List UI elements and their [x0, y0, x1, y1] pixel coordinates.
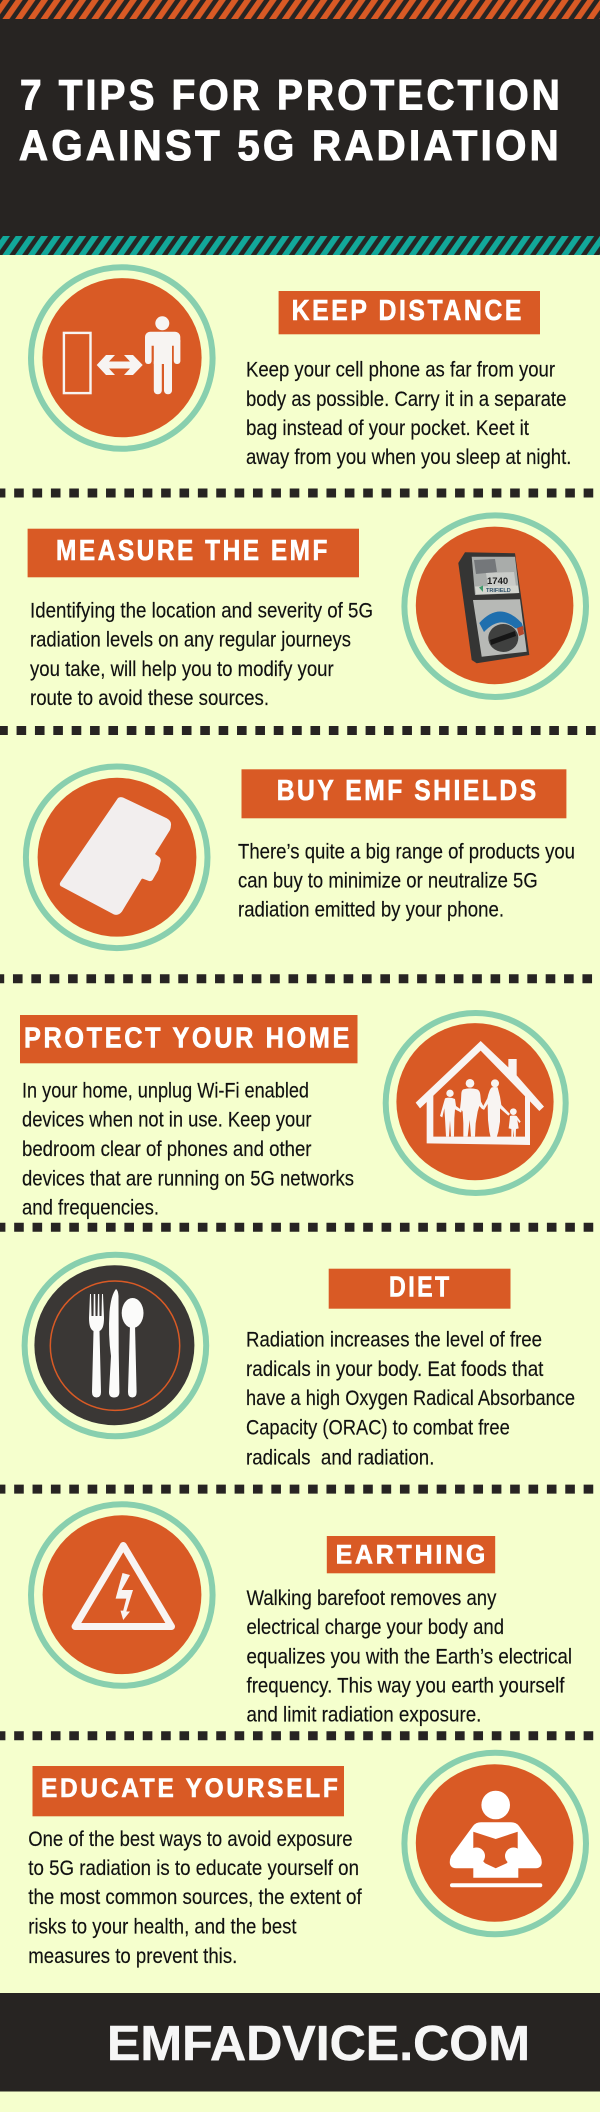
icon: person reading a book: [404, 1753, 586, 1934]
icon: emf meter: 1740: [487, 576, 508, 587]
title: 7 TIPS FOR PROTECTION: [20, 72, 563, 119]
text: keep distance: body as possible. Carry it in a separate: [246, 388, 566, 411]
icon: emf meter: [404, 515, 586, 697]
text: earthing: and limit radiation exposure.: [246, 1704, 481, 1727]
text: buy emf shields: [238, 840, 575, 922]
heading: diet: DIET: [389, 1272, 452, 1304]
text: earthing: [246, 1587, 572, 1727]
text: protect your home: and frequencies.: [22, 1196, 159, 1219]
text: measure the emf: [30, 599, 373, 710]
text: protect your home: devices that are running on 5G networks: [22, 1167, 354, 1190]
text: protect your home: bedroom clear of phones and other: [22, 1138, 312, 1161]
text: keep distance: bag instead of your pocket. Keet it: [246, 417, 529, 440]
icon: cutlery on plate: [25, 1255, 206, 1436]
footer banner: EMFADVICE.COM: [107, 2016, 530, 2071]
icon: phone distance from person: [31, 267, 213, 449]
heading: buy emf shields: BUY EMF SHIELDS: [277, 775, 539, 807]
text: educate yourself: the most common sources, the extent of: [28, 1886, 362, 1909]
panel: educate yourself: [28, 1753, 586, 1968]
heading: protect your home: [20, 1015, 358, 1063]
icon: high voltage warning: [31, 1504, 213, 1686]
heading: educate yourself: [32, 1766, 344, 1816]
text: educate yourself: [28, 1828, 362, 1968]
footer banner: [0, 1993, 600, 2092]
heading: earthing: EARTHING: [336, 1539, 488, 1569]
heading: buy emf shields: [242, 769, 566, 818]
heading: diet: [329, 1269, 510, 1309]
text: measure the emf: Identifying the location and severity of 5G: [30, 599, 373, 622]
text: earthing: frequency. This way you earth yourself: [246, 1674, 565, 1698]
text: diet: radicals in your body. Eat foods that: [246, 1358, 544, 1381]
heading: protect your home: PROTECT YOUR HOME: [24, 1022, 352, 1054]
text: earthing: electrical charge your body and: [246, 1616, 504, 1639]
text: educate yourself: to 5G radiation is to educate yourself on: [28, 1857, 359, 1880]
text: educate yourself: risks to your health, and the best: [28, 1915, 297, 1938]
text: keep distance: [246, 359, 571, 469]
header banner: [0, 0, 600, 255]
icon: phone shield case: [26, 766, 208, 948]
heading: educate yourself: EDUCATE YOURSELF: [41, 1773, 341, 1803]
text: measure the emf: route to avoid these sources.: [30, 687, 269, 710]
title: [19, 72, 563, 170]
text: diet: Radiation increases the level of free: [246, 1329, 542, 1352]
heading: keep distance: KEEP DISTANCE: [292, 295, 524, 327]
panel: measure the emf: [28, 515, 586, 710]
text: educate yourself: One of the best ways to avoid exposure: [28, 1828, 353, 1851]
panel: buy emf shields: [26, 766, 575, 948]
text: buy emf shields: radiation emitted by your phone.: [238, 899, 504, 922]
text: protect your home: In your home, unplug Wi-Fi enabled: [22, 1079, 309, 1102]
heading: measure the emf: MEASURE THE EMF: [56, 535, 330, 567]
text: keep distance: Keep your cell phone as far from your: [246, 359, 555, 382]
title: AGAINST 5G RADIATION: [19, 123, 562, 170]
text: educate yourself: measures to prevent this.: [28, 1945, 237, 1968]
text: protect your home: [22, 1079, 354, 1219]
text: diet: Capacity (ORAC) to combat free: [246, 1416, 510, 1439]
icon: emf meter: TRIFIELD: [486, 588, 511, 594]
text: measure the emf: radiation levels on any regular journeys: [30, 629, 351, 652]
panel: earthing: [31, 1504, 572, 1727]
icon: house with family: [386, 1013, 566, 1193]
panel: diet: [25, 1255, 575, 1469]
text: protect your home: devices when not in use. Keep your: [22, 1109, 312, 1132]
panel: protect your home: [20, 1013, 566, 1219]
heading: measure the emf: [28, 529, 359, 577]
text: buy emf shields: can buy to minimize or neutralize 5G: [238, 869, 538, 892]
text: measure the emf: you take, will help you to modify your: [30, 658, 334, 681]
text: diet: radicals and radiation.: [246, 1446, 434, 1469]
text: earthing: Walking barefoot removes any: [246, 1587, 497, 1610]
heading: keep distance: [279, 291, 540, 334]
panel: keep distance: [31, 267, 571, 469]
text: diet: [246, 1329, 575, 1469]
